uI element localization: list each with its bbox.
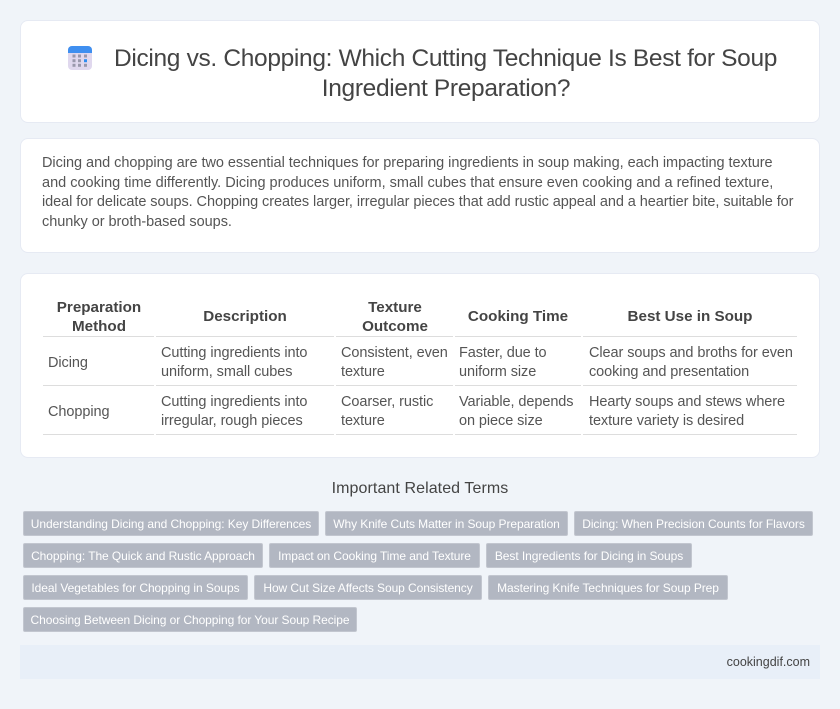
table row: dicing: cooking and presentation — [589, 364, 749, 380]
panel: intro text — [20, 138, 820, 253]
related terms tags — [23, 511, 813, 632]
panel: title — [20, 20, 820, 123]
table row: dicing: Consistent, even — [341, 345, 448, 361]
heading: Ingredient Preparation? — [322, 74, 570, 102]
heading — [114, 45, 777, 102]
table row: dicing: Dicing — [48, 355, 88, 371]
related terms tags: Choosing Between Dicing or Chopping for Your Soup Recipe — [31, 613, 349, 627]
table row: chopping: on piece size — [459, 413, 543, 429]
table row: dicing: Faster, due to — [459, 345, 547, 361]
intro paragraph — [42, 155, 794, 230]
heading: related terms: Important Related Terms — [332, 480, 508, 497]
related terms tags: Dicing: When Precision Counts for Flavors — [582, 517, 805, 531]
table header: Texture — [368, 299, 422, 316]
table header: Method — [72, 318, 126, 335]
related terms tags: Mastering Knife Techniques for Soup Prep — [497, 581, 719, 595]
table row: chopping: Coarser, rustic — [341, 394, 433, 410]
related terms tags: Why Knife Cuts Matter in Soup Preparation — [333, 517, 560, 531]
table row: dicing: uniform size — [459, 364, 536, 380]
intro paragraph: chunky or broth-based soups. — [42, 214, 232, 230]
related terms tags: Understanding Dicing and Chopping: Key Differences — [31, 517, 311, 531]
table row: dicing — [48, 345, 793, 380]
table row: chopping: texture variety is desired — [589, 413, 744, 429]
footer credit: cookingdif.com — [727, 655, 810, 669]
table header: Cooking Time — [468, 308, 568, 325]
related terms tags: Best Ingredients for Dicing in Soups — [495, 549, 683, 563]
intro paragraph: ideal for delicate soups. Chopping creates larger, irregular pieces that add rustic appeal and a heartier bite, suitable for — [42, 194, 793, 210]
related terms tags: How Cut Size Affects Soup Consistency — [263, 581, 473, 595]
table row: chopping — [48, 394, 785, 429]
related terms tags: Ideal Vegetables for Chopping in Soups — [31, 581, 240, 595]
table row: dicing: Clear soups and broths for even — [589, 345, 793, 361]
heading: Dicing vs. Chopping: Which Cutting Technique Is Best for Soup — [114, 45, 777, 72]
related terms tags: Chopping: The Quick and Rustic Approach — [31, 549, 255, 563]
table row: chopping: texture — [341, 413, 385, 429]
table row: chopping: Hearty soups and stews where — [589, 394, 785, 410]
table header: Description — [203, 308, 287, 325]
table row: dicing: Cutting ingredients into — [161, 345, 307, 361]
panel: comparison table — [20, 273, 820, 458]
table row: dicing: uniform, small cubes — [161, 364, 292, 380]
icon: calendar — [68, 46, 92, 70]
intro paragraph: and cooking time differently. Dicing produces uniform, small cubes that ensure even cooking and a refined texture, — [42, 175, 773, 191]
footer bar — [20, 645, 820, 679]
table row: chopping: irregular, rough pieces — [161, 413, 303, 429]
intro paragraph: Dicing and chopping are two essential techniques for preparing ingredients in soup making, each impacting texture — [42, 155, 773, 171]
table row: chopping: Variable, depends — [459, 394, 573, 410]
table header: Preparation — [57, 299, 141, 316]
table header — [57, 299, 752, 335]
related terms tags: Impact on Cooking Time and Texture — [278, 549, 471, 563]
table header: Outcome — [362, 318, 428, 335]
table row: chopping: Chopping — [48, 404, 109, 420]
table header: Best Use in Soup — [628, 308, 752, 325]
table row: chopping: Cutting ingredients into — [161, 394, 307, 410]
table row: dicing: texture — [341, 364, 385, 380]
